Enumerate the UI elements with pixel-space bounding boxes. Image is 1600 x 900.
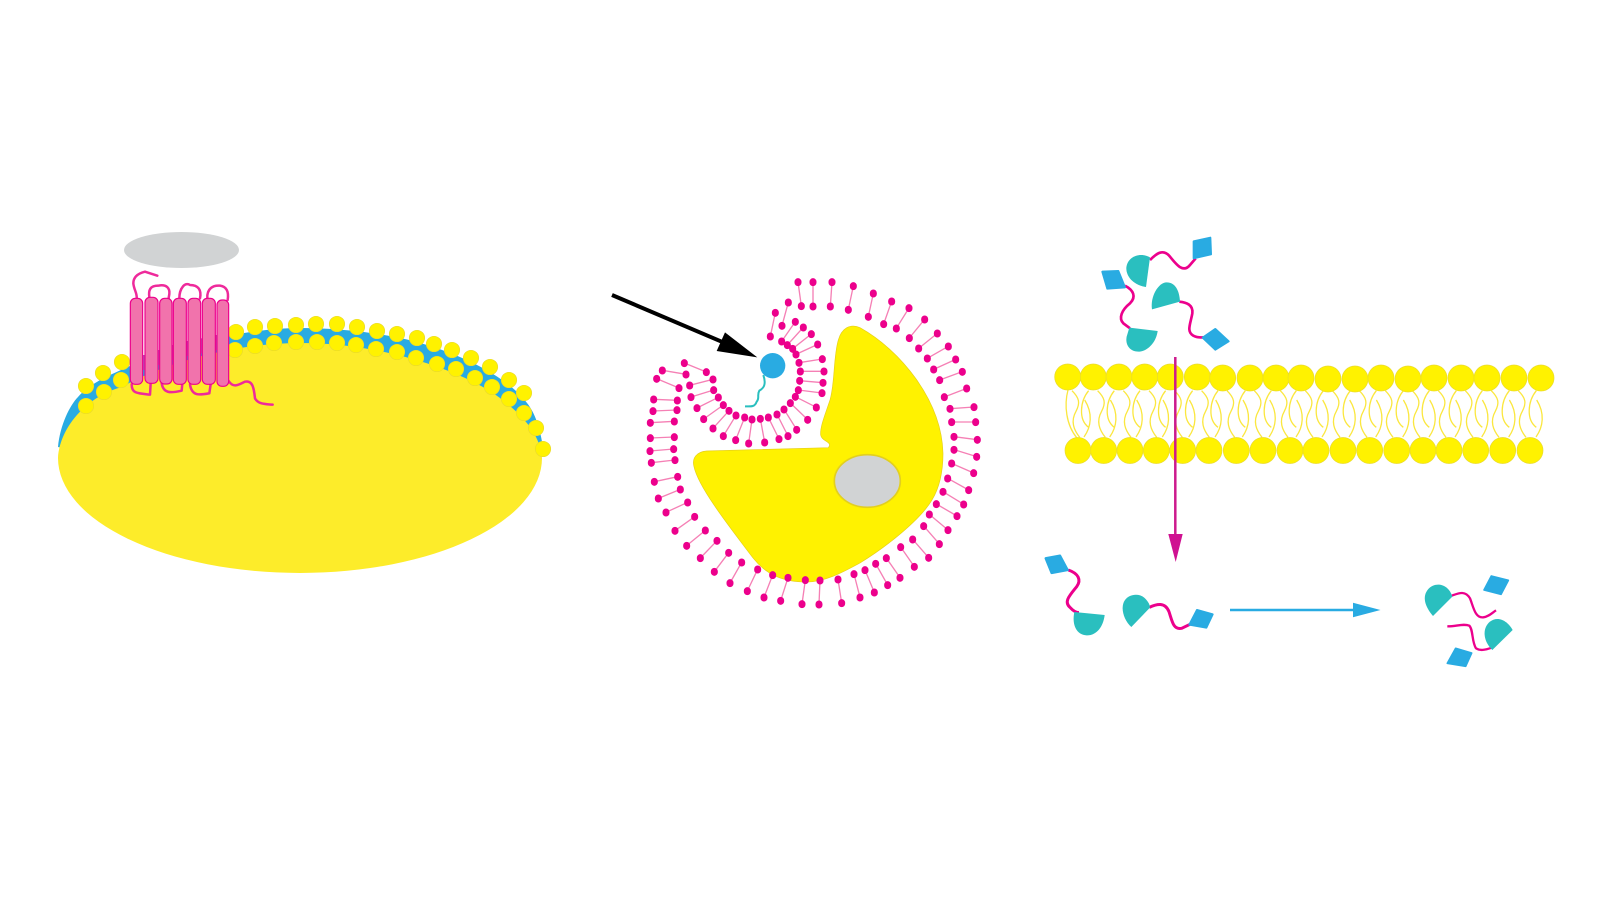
lipid heads <box>650 282 977 605</box>
particle: blue sphere with teal tail <box>745 353 785 406</box>
molecule 3 <box>1152 282 1229 350</box>
panel: cell with membrane receptor <box>58 232 551 573</box>
lipid heads: outer leaflet <box>1055 364 1554 392</box>
membrane lipids <box>650 282 977 605</box>
gaps between helices <box>142 335 217 370</box>
nucleus <box>834 455 900 507</box>
molecules above membrane <box>1102 238 1229 352</box>
molecule 4 <box>1046 556 1105 635</box>
lipid tails <box>1066 390 1542 438</box>
molecule 5 <box>1123 595 1213 629</box>
cell body <box>58 343 542 573</box>
ligand: grey ellipse <box>124 232 239 268</box>
arrow: magenta downward through membrane <box>1168 357 1183 562</box>
panel: enzyme cleavage at lipid bilayer <box>1046 238 1554 666</box>
membrane: blue band <box>58 328 543 500</box>
arrow: black pointing to particle <box>612 295 757 357</box>
receptor loops and tail <box>132 272 273 405</box>
molecule 1 <box>1126 238 1211 287</box>
phospholipid heads <box>78 316 551 457</box>
cleaved fragments <box>1425 576 1513 666</box>
transmembrane helices <box>130 297 229 386</box>
molecule 2 <box>1102 271 1158 352</box>
panel: phagocytosis cell in lipid membrane <box>612 282 977 605</box>
seven-transmembrane receptor <box>130 272 273 405</box>
lipid tails <box>650 282 977 604</box>
fragment: second cleaved molecule <box>1447 619 1513 666</box>
fragment: first cleaved molecule <box>1425 576 1508 617</box>
lipid bilayer <box>1055 364 1554 464</box>
cell body <box>693 326 943 582</box>
molecules below membrane <box>1046 556 1213 635</box>
arrow: blue rightward <box>1230 603 1380 617</box>
lipid heads: inner leaflet <box>1065 438 1543 464</box>
